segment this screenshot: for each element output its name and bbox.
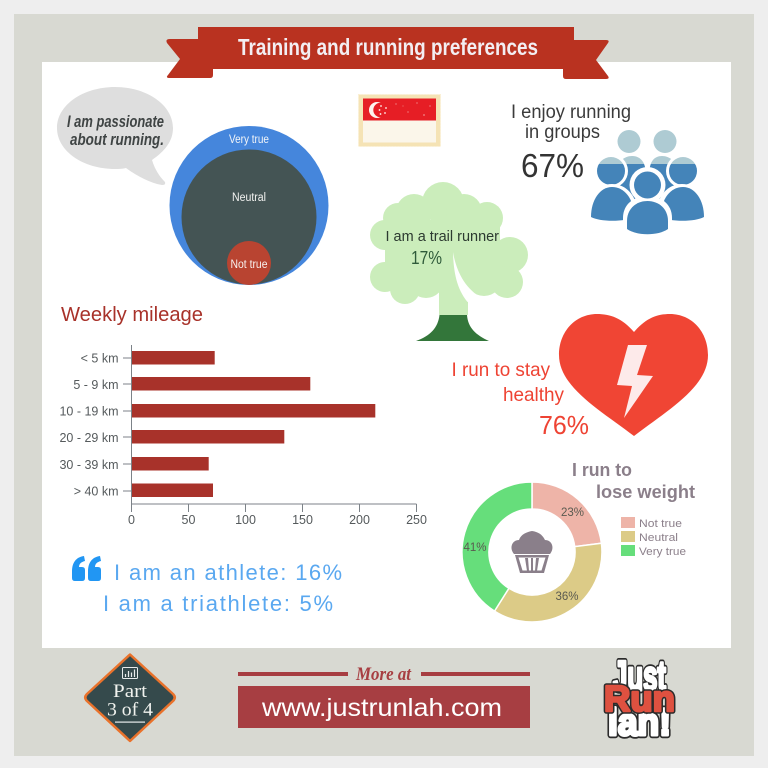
title banner — [166, 27, 609, 79]
segment: very true 41% — [462, 482, 532, 611]
category labels: 30 - 39 km — [59, 458, 118, 472]
text: I run to stay healthy 76%: healthy — [503, 384, 564, 406]
circle: neutral — [182, 150, 316, 284]
icon: muffin — [512, 531, 552, 573]
value labels: 250 — [406, 513, 427, 527]
icon: heart with lightning bolt — [559, 314, 708, 436]
heading: I run to lose weight: I run to — [572, 460, 632, 480]
text: I enjoy running in groups 67%: 67% — [521, 147, 584, 184]
donut chart: lose weight — [462, 482, 602, 622]
text: I enjoy running in groups 67%: in groups — [525, 122, 600, 143]
icon: tree with trail runner text: 17% — [411, 248, 442, 268]
logo: Just Run Lah: Run — [604, 678, 675, 719]
icon: tree with trail runner text — [370, 182, 528, 341]
category labels: 5 - 9 km — [73, 378, 118, 392]
segment: not true 23% — [532, 482, 601, 547]
circle: neutral: Neutral — [232, 192, 266, 204]
legend: lose weight: Not true — [639, 518, 682, 530]
circle: very true: Very true — [229, 134, 269, 146]
value labels — [128, 513, 427, 527]
value labels: 50 — [182, 513, 195, 527]
logo: Just Run Lah — [604, 652, 675, 744]
logo: Just Run Lah: Run — [604, 678, 675, 719]
speech bubble: I am passionate about running: I am passionate — [67, 112, 164, 131]
circle: not true: Not true — [230, 259, 268, 271]
value labels: 100 — [235, 513, 256, 527]
circle: very true — [170, 126, 328, 285]
logo: Just Run Lah: Just — [613, 652, 666, 699]
link panel: more at justrunlah — [238, 664, 530, 728]
link panel: more at justrunlah: More at — [355, 664, 412, 685]
text: I run to stay healthy 76%: 76% — [539, 410, 589, 440]
category labels: 20 - 29 km — [59, 431, 118, 445]
legend: lose weight — [621, 517, 686, 558]
value labels: 150 — [292, 513, 313, 527]
badge: part 3 of 4: 3 of 4 — [107, 700, 154, 720]
value labels: 0 — [128, 513, 135, 527]
category labels: > 40 km — [74, 484, 118, 498]
nested circles chart — [170, 126, 328, 285]
donut percent labels: 41% — [463, 542, 487, 554]
axes — [123, 345, 416, 512]
circle: not true — [227, 241, 271, 285]
donut percent labels — [463, 507, 584, 603]
logo: Just Run Lah: lah! — [608, 702, 671, 744]
value labels: 200 — [349, 513, 370, 527]
category labels: 10 - 19 km — [59, 404, 118, 418]
logo: Just Run Lah: Just — [613, 652, 666, 699]
icon: Singapore flag stamp — [358, 94, 440, 146]
speech bubble: I am passionate about running: about running. — [70, 130, 164, 149]
icon: quotation mark — [72, 556, 101, 581]
title banner: Training and running preferences — [238, 34, 538, 60]
badge: part 3 of 4 — [85, 654, 175, 741]
speech bubble: I am passionate about running — [57, 87, 173, 185]
text: I run to stay healthy 76% — [452, 359, 589, 440]
heading: I run to lose weight — [572, 460, 695, 502]
text: athlete and triathlete shares: I am a triathlete: 5% — [103, 591, 333, 616]
badge: part 3 of 4: Part — [113, 681, 148, 702]
donut percent labels: 36% — [555, 591, 579, 603]
icon: group of people — [588, 130, 706, 238]
icon: tree with trail runner text: I am a trail runner — [386, 228, 499, 245]
heading: weekly mileage: Weekly mileage — [61, 304, 203, 326]
donut percent labels: 23% — [561, 507, 584, 519]
text: I enjoy running in groups 67%: I enjoy running — [511, 102, 631, 123]
link panel: more at justrunlah: www.justrunlah.com — [261, 694, 502, 722]
text: athlete and triathlete shares: I am an athlete: 16% — [114, 560, 342, 585]
text: I run to stay healthy 76%: I run to stay — [452, 359, 550, 381]
segment: neutral 36% — [494, 543, 602, 622]
legend: lose weight: Very true — [639, 546, 686, 558]
bar chart: weekly mileage — [59, 345, 427, 527]
category labels: < 5 km — [81, 352, 118, 366]
bars — [132, 351, 375, 497]
legend: lose weight: Neutral — [639, 532, 678, 544]
logo: Just Run Lah: lah! — [608, 702, 671, 744]
text: athlete and triathlete shares — [103, 560, 342, 616]
text: I enjoy running in groups 67% — [511, 102, 631, 184]
heading: I run to lose weight: lose weight — [596, 482, 695, 502]
category labels — [59, 352, 118, 498]
